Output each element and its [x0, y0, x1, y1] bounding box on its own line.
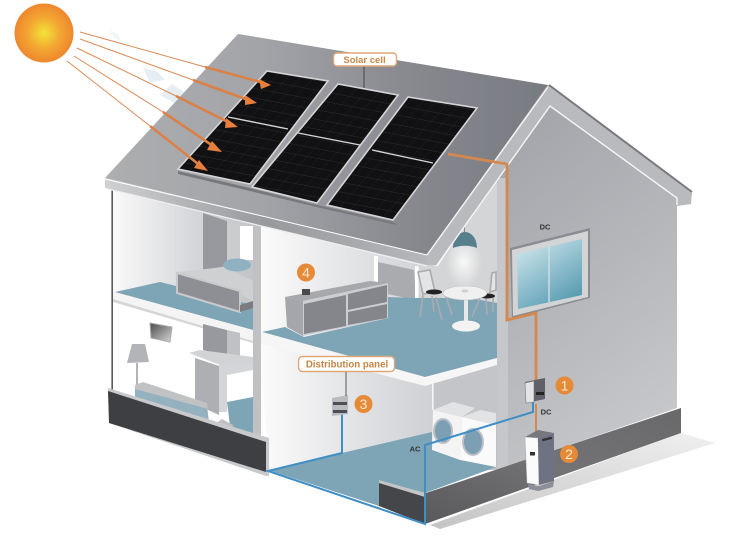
window: [510, 228, 590, 318]
panel 2: [252, 84, 398, 203]
solar panels: [178, 71, 477, 225]
panel frames shadow: [178, 171, 397, 225]
lower right floor: [268, 432, 496, 506]
pendant lamp: [453, 222, 477, 248]
sun: [14, 4, 74, 62]
panel 3: [327, 97, 477, 220]
label DC top: DC: [540, 222, 551, 232]
interior: lower right room: [260, 340, 497, 470]
pillow: [223, 258, 251, 272]
exterior gable wall: [497, 105, 677, 470]
upper left room dark column: [203, 213, 227, 270]
number badge 2: [560, 445, 578, 463]
background clouds: [110, 30, 184, 104]
front roof: [105, 34, 548, 255]
upper right floor: [262, 297, 497, 377]
right foundation: [425, 408, 681, 524]
label DC bottom: DC: [541, 408, 552, 416]
roof side band and gable trim: [427, 85, 692, 265]
roof front edge: [105, 178, 427, 265]
ground shadow: [430, 433, 715, 529]
label: distribution panel: Distribution panel: [306, 360, 388, 370]
number badge 3: [354, 395, 372, 413]
inverter: [525, 378, 545, 403]
interior: lower left room: [112, 296, 254, 445]
number badge 2: 2: [565, 446, 573, 462]
label: solar cell: Solar cell: [343, 55, 386, 66]
number badge 4: 4: [302, 264, 310, 280]
upper left floor slab: [113, 292, 262, 343]
distribution panel box: [332, 395, 348, 416]
bed: [177, 258, 253, 312]
dresser item: [302, 289, 310, 295]
battery: [525, 430, 554, 491]
back room corner: [378, 262, 416, 300]
lower room picture: [150, 323, 172, 342]
foundation inner piece: [379, 481, 425, 524]
ray arrowheads: [194, 79, 271, 171]
AC cable blue: [268, 402, 533, 524]
washing machines: [432, 402, 496, 467]
label: distribution panel: [298, 356, 394, 372]
upper right floor slab: [262, 332, 497, 386]
dresser: [285, 281, 388, 336]
fireplace: [189, 324, 253, 434]
number badge 1: [556, 376, 574, 394]
left foundation: [108, 388, 269, 476]
left wall line: [112, 188, 113, 391]
sun rays: [67, 32, 264, 167]
upper left floor: [115, 282, 253, 330]
washer recess wall: [433, 362, 497, 420]
floor lamp: [127, 344, 149, 386]
dining chairs: [418, 270, 496, 320]
interior: upper left room: [112, 186, 254, 312]
number badge 3: 3: [360, 396, 368, 412]
label: solar cell: [334, 53, 396, 66]
panel 1: [178, 71, 328, 184]
number badge 4: [297, 264, 315, 282]
label connector lines: [346, 66, 364, 396]
label AC: AC: [410, 444, 421, 454]
dining table: [443, 286, 487, 332]
wall cut strip: [497, 178, 508, 470]
number badge 1: 1: [561, 378, 569, 394]
column between rooms: [253, 224, 261, 440]
DC cable orange: [448, 154, 536, 434]
sofa: [135, 382, 233, 436]
interior: upper right room: [260, 178, 497, 380]
lamp glow: [446, 236, 482, 288]
